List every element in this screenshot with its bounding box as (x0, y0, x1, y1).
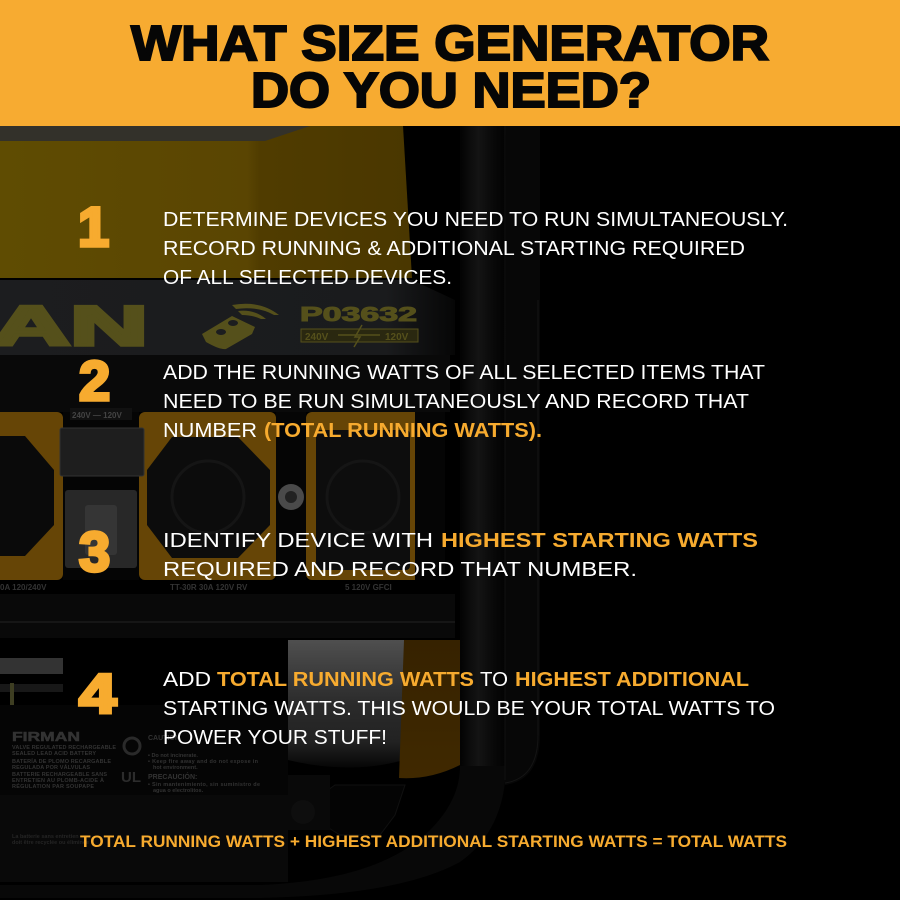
number 3: 3 (79, 520, 110, 583)
step 4 text: ADD (163, 668, 211, 691)
voltage sticker: 240V — 120V (72, 411, 122, 420)
dark logo band (0, 280, 455, 355)
step 1 text: RECORD RUNNING & ADDITIONAL STARTING REQUIRED (163, 237, 745, 260)
yellow generator housing (0, 126, 412, 278)
step 2 text: (TOTAL RUNNING WATTS). (264, 419, 542, 442)
battery label: RÉGULATION PAR SOUPAPE (12, 782, 94, 790)
battery label: ENTRETIEN AU PLOMB-ACIDE À (12, 777, 104, 784)
orange side panel (399, 640, 460, 778)
step 2 text: NUMBER (163, 419, 257, 442)
step 1 (78, 195, 788, 289)
outlet caption GFCI: 5 120V GFCI (345, 583, 392, 592)
step 3 (79, 520, 758, 583)
top control strip (0, 126, 310, 141)
step 4 text: HIGHEST ADDITIONAL (515, 668, 749, 691)
outlet: right GFCI (316, 430, 410, 570)
step 4 text: TOTAL RUNNING WATTS (217, 668, 474, 691)
step 4 text: POWER YOUR STUFF! (163, 726, 387, 749)
step 2 (79, 349, 765, 442)
battery label: UL (121, 769, 141, 786)
step 1 text: DETERMINE DEVICES YOU NEED TO RUN SIMULTANEOUSLY. (163, 208, 788, 231)
title: DO YOU NEED? (251, 64, 651, 118)
icon: remote control (202, 304, 279, 349)
step 4 text (163, 668, 775, 749)
battery label: SEALED LEAD ACID BATTERY (12, 751, 96, 757)
voltage badge (301, 325, 418, 347)
outlet caption TT-30R: TT-30R 30A 120V RV (170, 583, 248, 592)
battery label: • Keep fire away and do not expose in (148, 759, 259, 765)
lower label block (0, 795, 288, 882)
step 1 text: OF ALL SELECTED DEVICES. (163, 266, 452, 289)
frame tubes (0, 126, 540, 898)
breaker cover (60, 428, 144, 476)
step 3 text: IDENTIFY DEVICE WITH (163, 529, 433, 552)
battery label (0, 705, 288, 795)
number 1: 1 (78, 195, 109, 258)
indicator column (276, 412, 306, 580)
step 1 text (163, 208, 788, 289)
step 3 text: HIGHEST STARTING WATTS (441, 529, 758, 552)
step 4 (79, 663, 775, 749)
outlet panels (0, 412, 438, 580)
step 3 text: REQUIRED AND RECORD THAT NUMBER. (163, 558, 637, 581)
outlet: center (147, 437, 270, 558)
step 2 text: ADD THE RUNNING WATTS OF ALL SELECTED ITEMS THAT (163, 361, 765, 384)
left grey block (0, 658, 63, 674)
battery label: PRECAUCIÓN: (148, 772, 197, 781)
battery label: • Sin mantenimiento, sin suministro de (148, 782, 260, 788)
step 4 text: STARTING WATTS. THIS WOULD BE YOUR TOTAL WATTS TO (163, 697, 775, 720)
step 4 text: TO (480, 668, 508, 691)
step 2 text (163, 361, 765, 442)
voltage sticker (70, 408, 132, 420)
battery label: agua o electrolitos. (153, 788, 204, 794)
outlet: left (0, 436, 54, 556)
battery label: BATTERIE RECHARGEABLE SANS (12, 772, 107, 778)
title (131, 17, 769, 118)
battery label: BATERÍA DE PLOMO RECARGABLE (12, 757, 111, 765)
title: WHAT SIZE GENERATOR (131, 17, 769, 71)
number 4: 4 (79, 663, 117, 726)
lower label block: doit être recyclée ou éliminée (12, 840, 89, 846)
switch (65, 490, 137, 568)
number 2: 2 (79, 349, 110, 412)
grey bracket (288, 640, 404, 768)
voltage badge: 240V (305, 332, 329, 343)
step 3 text (163, 529, 758, 581)
outlet captions: 0A 120/240V (0, 583, 47, 592)
lower label block: La batterie sans entretien (12, 834, 79, 840)
header banner (0, 0, 900, 126)
breaker column (63, 412, 139, 580)
battery label: CAUTION (148, 735, 180, 742)
model number: P03632 (300, 304, 417, 326)
battery label: • Do not incinerate. (148, 753, 198, 759)
voltage badge: 120V (385, 332, 409, 343)
battery label: REGULADA POR VÁLVULAS (12, 764, 90, 771)
battery label: hot environment. (153, 765, 198, 771)
battery label: FIRMAN (12, 729, 80, 744)
rail (0, 594, 455, 638)
battery label: VALVE REGULATED RECHARGEABLE (12, 745, 116, 751)
step 2 text: NEED TO BE RUN SIMULTANEOUSLY AND RECORD THAT (163, 390, 749, 413)
formula footer: TOTAL RUNNING WATTS + HIGHEST ADDITIONAL STARTING WATTS = TOTAL WATTS (80, 832, 787, 851)
